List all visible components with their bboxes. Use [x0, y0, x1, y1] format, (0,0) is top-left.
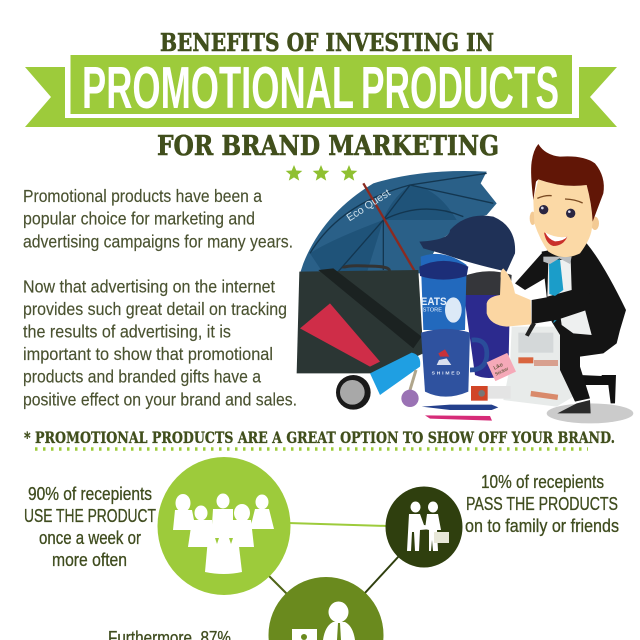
- intro text block: Now that advertising on the internet: [23, 276, 275, 296]
- icon: sticky note: [487, 353, 516, 381]
- ribbon banner: [25, 55, 617, 127]
- title: benefits of investing in: BENEFITS OF INVESTING IN: [160, 28, 494, 57]
- icon: blue mug: SHIMED: [432, 370, 460, 376]
- icon: businessman with sign: [292, 602, 355, 640]
- intro text block: advertising campaigns for many years.: [23, 232, 293, 252]
- icon: black bag: [297, 266, 423, 373]
- icon: umbrella: Eco Quest: [344, 187, 393, 224]
- star 1: [286, 165, 302, 181]
- intro text block: positive effect on your brand and sales.: [23, 390, 297, 410]
- icon: sticky note: Like: [493, 362, 504, 372]
- star 2: [313, 165, 329, 181]
- intro text block: [23, 186, 297, 410]
- icon: blue mug: [421, 329, 487, 397]
- icon: blue tumbler: STORE: [423, 308, 442, 314]
- intro text block: Promotional products have been a: [23, 186, 262, 206]
- text: 90% use the product: once a week or: [39, 528, 141, 548]
- connector lines: [268, 523, 399, 596]
- icon: flashlight: [336, 353, 420, 410]
- ribbon centre panel: [70, 55, 572, 114]
- text: 90% use the product: more often: [52, 550, 127, 570]
- icon: steel travel mug: [463, 271, 512, 378]
- intro text block: important to show that promotional: [23, 344, 273, 364]
- icon: usb stick: [471, 386, 511, 401]
- ribbon heading text: PROMOTIONAL: [82, 55, 354, 121]
- illustration: promotional products and businessman: [292, 144, 633, 423]
- icon: two people shaking hands: [407, 502, 449, 551]
- icon: blue tumbler: EATS: [421, 296, 447, 308]
- icon: businessman cartoon: [487, 144, 633, 423]
- circle: people using product: [158, 457, 290, 595]
- intro text block: the results of advertising, it is: [23, 322, 231, 342]
- icon: blue pen: [422, 405, 498, 410]
- text: 10% pass the products: [465, 472, 619, 536]
- circle: handshake: [386, 486, 462, 568]
- intro text block: products and branded gifts have a: [23, 366, 261, 386]
- icon: umbrella: [292, 171, 497, 298]
- text: 90% use the product: [24, 484, 156, 570]
- icon: pink pen: [425, 415, 492, 421]
- text: 90% use the product: USE THE PRODUCT: [24, 506, 156, 526]
- three stars: [286, 165, 357, 181]
- text: 10% pass the products: on to family or friends: [465, 516, 619, 536]
- intro text block: popular choice for marketing and: [23, 208, 255, 228]
- intro text block: provides such great detail on tracking: [23, 299, 287, 319]
- ribbon shape: [25, 67, 617, 127]
- circle: bottom green: [268, 577, 384, 640]
- subtitle: for brand marketing: FOR BRAND MARKETING: [157, 131, 499, 162]
- icon: navy cap: [419, 216, 515, 272]
- icon: blue tumbler: [419, 254, 468, 330]
- star 3: [341, 165, 357, 181]
- icon: keychain: [401, 370, 419, 407]
- icon: sticky note: Sticker: [494, 366, 510, 377]
- icon: calendar: [503, 327, 573, 407]
- text: 10% pass the products: 10% of recepients: [481, 472, 604, 492]
- icon: group of people: [173, 494, 274, 574]
- text: 90% use the product: 90% of recepients: [28, 484, 152, 504]
